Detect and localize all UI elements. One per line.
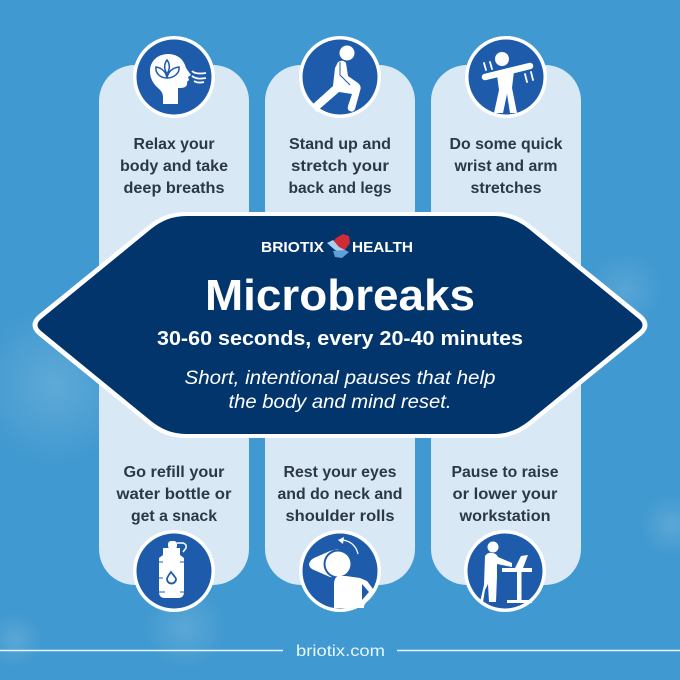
logo: Briotix Health: HEALTH <box>352 239 413 256</box>
icon: standing leg stretch <box>299 36 381 118</box>
text: workstation: or lower your <box>452 486 558 503</box>
text: relax: Relax your <box>134 136 214 153</box>
text: rest eyes: Rest your eyes <box>284 464 396 481</box>
logo: Briotix Health: BRIOTIX <box>261 239 324 256</box>
text: stand up: stretch your <box>291 158 389 175</box>
text: rest eyes: shoulder rolls <box>286 508 394 525</box>
icon: breathing head <box>133 36 215 118</box>
text: rest eyes: and do neck and <box>278 486 402 503</box>
title: Microbreaks <box>205 271 475 320</box>
text: relax: deep breaths <box>124 180 224 197</box>
icon: neck rolls <box>299 530 381 612</box>
text: stand up: back and legs <box>288 180 392 197</box>
panel: central hexagon <box>32 212 648 438</box>
text: wrist stretches: wrist and arm <box>453 158 558 175</box>
icon: standing desk <box>464 530 546 612</box>
footer: briotix.com <box>296 643 385 660</box>
description: the body and mind reset. <box>228 392 452 413</box>
text: refill: Go refill your <box>124 464 224 481</box>
text: workstation: workstation <box>458 508 550 525</box>
text: refill: get a snack <box>131 508 217 525</box>
text: refill: water bottle or <box>115 486 232 503</box>
text: stand up: Stand up and <box>289 136 391 153</box>
icon: water bottle <box>133 530 215 612</box>
icon: arm stretch <box>465 36 547 118</box>
text: workstation: Pause to raise <box>452 464 559 481</box>
subtitle: 30-60 seconds, every 20-40 minutes <box>157 328 523 350</box>
text: wrist stretches: Do some quick <box>450 136 563 153</box>
text: wrist stretches: stretches <box>470 180 542 197</box>
text: relax: body and take <box>120 158 228 175</box>
logo: Briotix Health <box>261 234 413 258</box>
panel: top and bottom tip cards <box>99 65 581 585</box>
description: Short, intentional pauses that help <box>184 368 496 389</box>
